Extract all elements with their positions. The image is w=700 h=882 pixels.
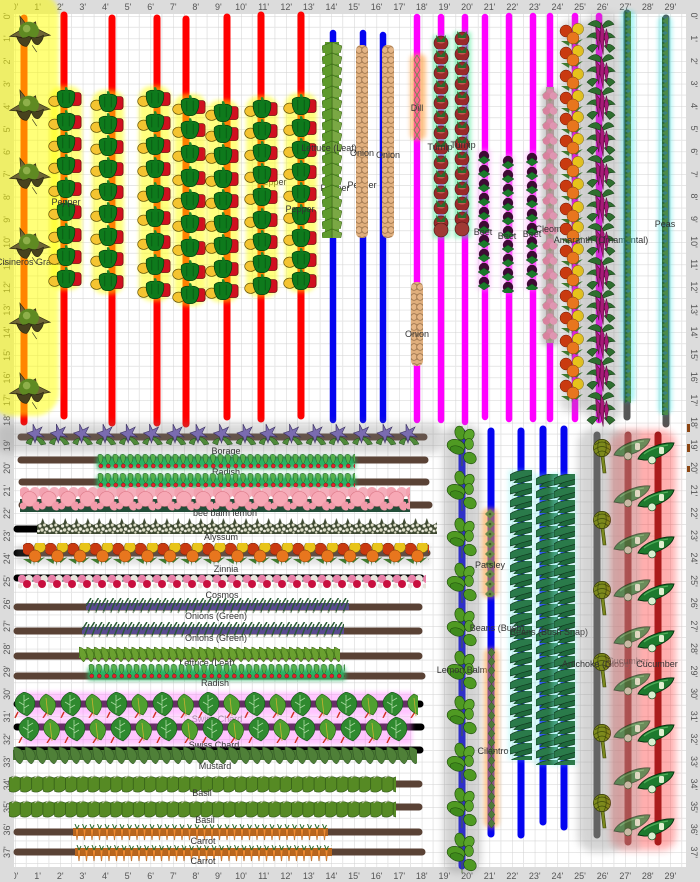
ruler: right: 31' [689,711,699,723]
plant: borage row [0,423,442,456]
plant: cosmos row [18,575,426,600]
plant: cilantro [477,648,509,828]
plant: bean column 3 [510,474,588,765]
ruler: left: 34' [2,778,12,790]
ruler: left: 18' [2,414,12,426]
plant: peas column 2 [655,16,676,415]
ruler: right: 20' [689,462,699,474]
plant: lettuce row [79,645,340,668]
plant: onions green row 2: Onions (Green) [185,633,247,643]
ruler: top: 10' [235,2,247,12]
ruler: top: 13' [303,2,315,12]
plant: dill: Dill [411,103,423,113]
ruler: left: 9' [2,216,12,223]
ruler: top: 20' [461,2,473,12]
gray vertical row lines [627,13,666,424]
plant: pepper row 3 [138,86,171,301]
ruler: left: 32' [2,733,12,745]
lower vertical row lines [462,429,658,866]
plant: swiss chard row 1 [13,692,418,724]
ruler: top: 17' [393,2,405,12]
ruler: top: 28' [642,2,654,12]
plant: artichoke column [562,428,632,852]
ruler: left: 6' [2,148,12,155]
ruler: bottom: 25' [574,871,586,881]
ruler: bottom: 15' [348,871,360,881]
plant: onion column 1: Onion [350,148,374,158]
ruler: top: 19' [439,2,451,12]
plant: radish row 3 [88,664,345,688]
ruler: bottom: 20' [461,871,473,881]
plant: swiss chard row 2: Swiss Chard [189,740,239,750]
ruler: left: 4' [2,103,12,110]
ruler: right: 25' [689,575,699,587]
plant: parsley: Parsley [475,560,506,570]
plant: pepper row 6 [245,96,287,297]
ruler: top: 22' [506,2,518,12]
plant: lemon balm column: Lemon Balm [437,665,487,675]
ruler: top: 25' [574,2,586,12]
plant: onion column 3 [405,282,429,366]
ruler: right: 26' [689,598,699,610]
horizontal brown row lines [17,437,429,852]
ruler: bottom: 7' [170,871,177,881]
ruler: left: 16' [2,371,12,383]
ruler: bottom: 29' [665,871,677,881]
ruler: bottom: 23' [529,871,541,881]
ruler: right: 11' [689,259,699,270]
ruler: bottom: 0' [12,871,19,881]
ruler: left: 12' [2,281,12,293]
ruler: top: 4' [102,2,109,12]
ruler: top: 12' [280,2,292,12]
ruler: right: 33' [689,756,699,768]
blue vertical row lines (top) [333,33,383,420]
ruler: right: 24' [689,553,699,565]
plant: dill [410,54,426,140]
plant: basil row 2 [9,800,396,825]
ruler: left: 26' [2,597,12,609]
plant: carrot row 2: Carrot [190,856,216,866]
plant: carrot row 1: Carrot [190,836,216,846]
plant: pepper row 6: Pepper [257,177,287,187]
plant: amaranth column [554,14,648,427]
plant: zinnia row: Zinnia [214,564,238,574]
ruler: right: 23' [689,530,699,542]
ruler: bottom: 1' [34,871,41,881]
plant: bee balm lemon row: bee balm lemon [193,508,257,518]
magenta vertical row lines [417,16,599,422]
ruler: right: 0' [689,13,699,20]
ruler: left: 8' [2,193,12,200]
plant: cleome column: Cleome [535,224,567,234]
ruler: left: 1' [2,35,12,42]
ruler: left: 21' [2,484,12,496]
plant: carrot row 1 [73,824,328,846]
plant: turnip column 1 [427,34,453,238]
ruler: left: 0' [2,12,12,19]
ruler: right: 21' [689,485,699,497]
ruler: left: 5' [2,125,12,132]
ruler: bottom: 22' [506,871,518,881]
ruler: right: 14' [689,327,699,339]
ruler: right: 27' [689,620,699,632]
ruler: bottom: 11' [258,871,269,881]
plant: pepper row 1: Pepper [51,197,81,207]
ruler: right: 29' [689,666,699,678]
plant: alyssum row: Alyssum [204,532,238,542]
plant: radish row 1: Radish [212,467,240,477]
ruler: bottom: 9' [215,871,222,881]
ruler: top: 23' [529,2,541,12]
plant: radish row 2 [97,473,355,489]
plant: cucumber columns: Cucumber [607,656,649,666]
plant: mustard row: Mustard [199,761,231,771]
ruler: left: 36' [2,823,12,835]
ruler: bottom: 14' [326,871,338,881]
plant: beet column 3: Beet [523,229,542,239]
plant: radish row 1 [97,454,355,477]
ruler: right: 37' [689,846,699,858]
plant: artichoke column: Artichoke (Globe) [562,659,632,669]
ruler: bottom: 16' [371,871,383,881]
plant: onion column 2 [376,45,400,238]
ruler: right: 17' [689,394,699,406]
plant: onions green row 1: Onions (Green) [185,611,247,621]
ruler: top [0,0,700,14]
ruler: left: 14' [2,326,12,338]
ruler: top: 21' [484,2,496,12]
ruler: bottom: 12' [280,871,292,881]
ruler: bottom: 27' [619,871,631,881]
red vertical row lines [24,15,301,424]
plant: bee balm lemon row [20,487,410,518]
ruler: bottom: 5' [125,871,132,881]
plant: cleome column [535,87,567,346]
ruler: top: 1' [34,2,41,12]
plant: pepper row 1 [49,86,82,290]
plant: turnip column 2: Turnip [450,140,476,150]
ruler: top: 5' [125,2,132,12]
ruler: top: 18' [416,2,428,12]
plant: pepper row 7 [284,93,317,292]
ruler: right: 2' [689,58,699,65]
ruler: left: 19' [2,439,12,451]
ruler: left: 23' [2,530,12,542]
plant: beet column 2 [498,155,517,293]
plant: lettuce leaf column: Pepper [320,183,350,193]
ruler: bottom: 17' [393,871,405,881]
plant: lemon balm column [437,425,487,873]
plant: basil row 1 [9,775,396,798]
ruler: left: 20' [2,462,12,474]
ruler: bottom: 6' [147,871,154,881]
ruler: top: 11' [258,2,269,12]
ruler: right: 3' [689,80,699,87]
plant: beet column 3 [523,152,542,290]
ruler: left: 17' [2,394,12,406]
ruler: left: 15' [2,349,12,361]
ruler: left: 27' [2,620,12,632]
plant: turnip column 2 [450,30,476,238]
plant: amaranth column: Amaranth (Ornamental) [554,235,648,245]
ruler: left: 2' [2,58,12,65]
ruler: top: 2' [57,2,64,12]
ruler: top: 14' [326,2,338,12]
ruler: bottom: 2' [57,871,64,881]
plant: cosmos row: Cosmos [205,590,239,600]
ruler: bottom: 13' [303,871,315,881]
ruler: right: 1' [689,35,699,42]
plant: beet column 2: Beet [498,231,517,241]
plant: zinnia column [560,20,588,412]
plant: cucumber columns: Cucumber [636,659,678,669]
ruler: right: 15' [689,349,699,361]
plant: cucumber columns [607,430,678,850]
plant: swiss chard row 2 [17,717,412,750]
ruler: left: 3' [2,80,12,87]
ruler: right: 28' [689,643,699,655]
plant: pepper row 5 [206,100,239,302]
plant: onion column 2: Onion [376,150,400,160]
ruler: right: 5' [689,126,699,133]
ruler: left: 25' [2,575,12,587]
ruler: top: 26' [597,2,609,12]
ruler: bottom: 4' [102,871,109,881]
ruler: right: 22' [689,507,699,519]
ruler: top: 7' [170,2,177,12]
ruler: right: 10' [689,236,699,248]
plant: peas column 1 [621,10,635,403]
ruler: right: 13' [689,304,699,316]
ruler: bottom: 21' [484,871,496,881]
ruler: right: 9' [689,216,699,223]
ruler: right: 6' [689,148,699,155]
ruler: right: 12' [689,281,699,293]
plant: turnip column 1: Turnip [427,142,453,152]
plant: beet column 1 [474,150,493,290]
plant: onions green row 2 [82,622,344,643]
ruler: top: 9' [215,2,222,12]
plant: Cisneros Grande [0,0,66,416]
plant: pepper row 4 [173,94,206,306]
plant: zinnia row [16,543,430,574]
ruler: right: 8' [689,193,699,200]
ruler: left: 28' [2,643,12,655]
ruler: right: 35' [689,801,699,813]
plant: carrot row 2 [75,845,332,866]
ruler: bottom: 3' [79,871,86,881]
ruler: top: 0' [12,2,19,12]
plant: beet column 1: Beet [474,227,493,237]
ruler: bottom: 8' [192,871,199,881]
ruler: top: 24' [552,2,564,12]
plant: onion column 1: Pepper [347,180,377,190]
ruler: top: 15' [348,2,360,12]
ruler: right: 4' [689,103,699,110]
ruler: left [0,0,14,882]
ruler: left: 30' [2,688,12,700]
ruler: right: 32' [689,733,699,745]
ruler: left: 35' [2,801,12,813]
ruler: left: 13' [2,304,12,316]
ruler: left: 33' [2,756,12,768]
ruler: right: 18' [689,417,699,429]
plant: parsley [475,508,506,598]
plant: onions green row 1 [86,598,349,621]
plant: bean column 2 [534,474,559,765]
plant: peas column 2: Peas [655,219,676,229]
plant: radish row 3: Radish [201,678,229,688]
ruler: top: 29' [665,2,677,12]
plant: lettuce leaf column [301,42,357,238]
ruler: left: 22' [2,507,12,519]
plant: alyssum row [37,518,437,542]
plant: lettuce row: Lettuce (Leaf) [179,658,235,668]
ruler: left: 37' [2,846,12,858]
plant: mustard row [13,747,417,771]
ruler: left: 11' [2,259,12,270]
ruler: bottom: 19' [439,871,451,881]
ruler: top: 8' [192,2,199,12]
plant: pepper row 7: Pepper [285,204,315,214]
ruler: bottom: 10' [235,871,247,881]
ruler: bottom: 24' [552,871,564,881]
plant: lettuce leaf column: Lettuce (Leaf) [301,143,357,153]
horizontal black row lines [17,529,421,750]
plant: borage row: Borage [211,446,241,456]
ruler: top: 3' [79,2,86,12]
plant: bean column 1: Beans (Bush) [470,623,524,633]
ruler: right: 19' [689,440,699,452]
ruler: bottom: 28' [642,871,654,881]
ruler: top: 27' [619,2,631,12]
plant: pepper row 2 [91,90,124,294]
ruler: left: 31' [2,710,12,722]
ruler: left: 7' [2,171,12,178]
ruler: bottom: 18' [416,871,428,881]
plant: bean column 1 [470,470,533,760]
plant: swiss chard row 1: Swiss Chard [192,714,242,724]
ruler: top: 6' [147,2,154,12]
ruler: right: 16' [689,372,699,384]
plant: bean column 3: Beans (Bush Snap) [510,627,588,637]
plant: cilantro: Cilantro [477,746,509,756]
plant: onion column 1 [347,45,377,238]
ruler: right: 7' [689,171,699,178]
plant: basil row 1: Basil [192,788,212,798]
ruler: left: 24' [2,552,12,564]
ruler: right [686,0,700,882]
ruler: left: 29' [2,665,12,677]
ruler: bottom: 26' [597,871,609,881]
plant: onion column 3: Onion [405,329,429,339]
ruler: right: 30' [689,688,699,700]
ruler: right: 36' [689,824,699,836]
ruler: left: 10' [2,236,12,248]
ruler: top: 16' [371,2,383,12]
ruler: bottom [0,867,700,882]
plant: basil row 2: Basil [195,815,215,825]
ruler: right: 34' [689,779,699,791]
